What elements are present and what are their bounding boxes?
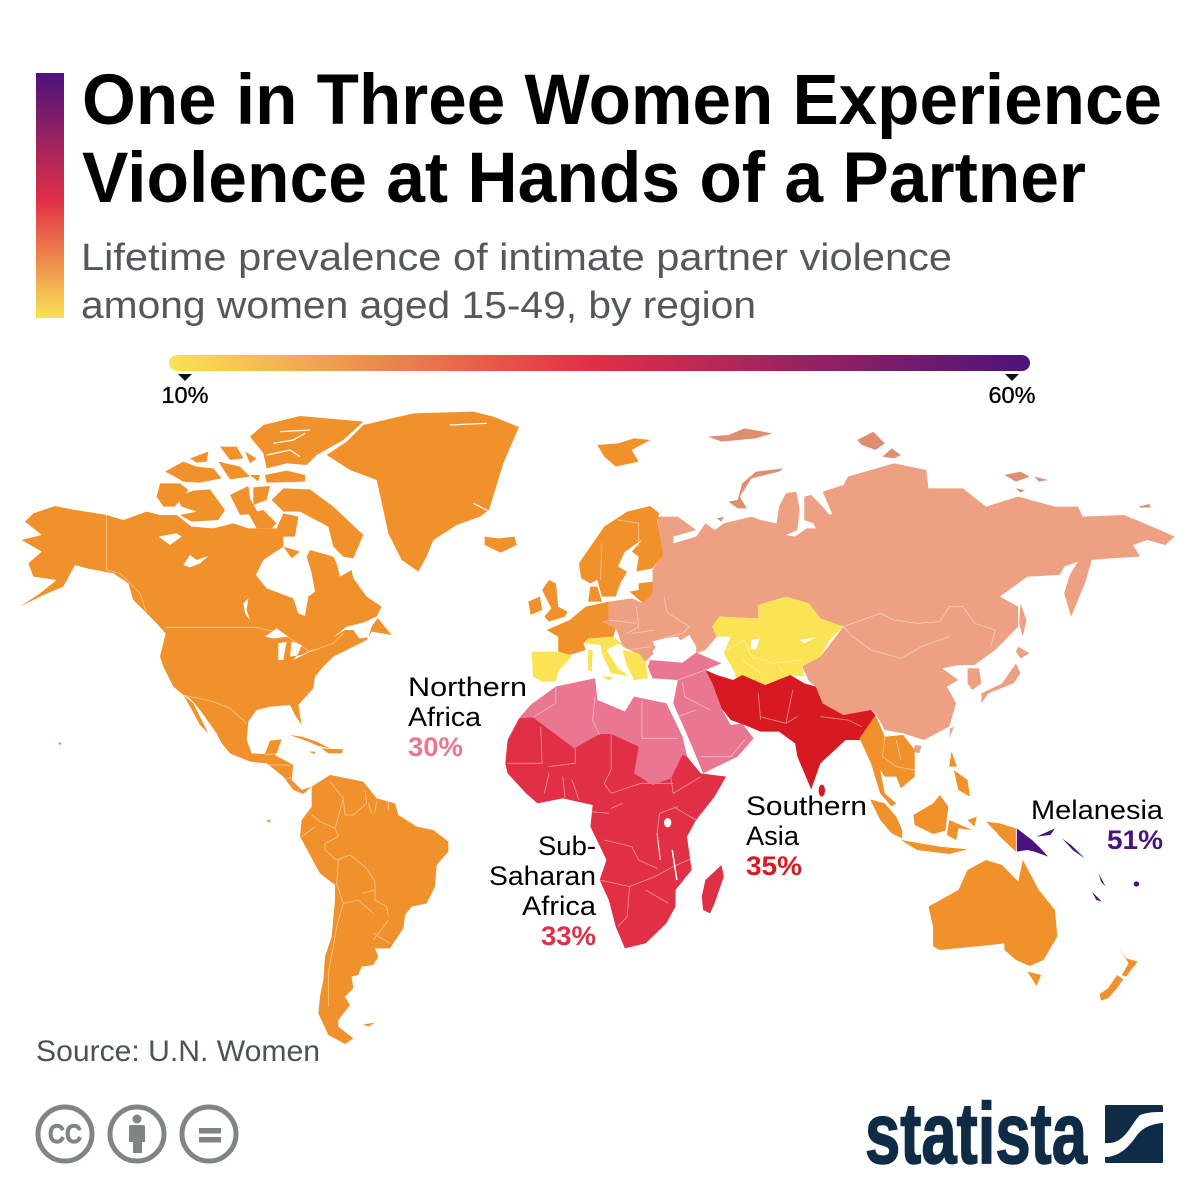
label: Northern Africa: Africa	[408, 702, 482, 732]
colour scale legend: 60%	[988, 382, 1036, 408]
region: Southern Asia	[705, 670, 876, 797]
icon: attribution	[110, 1107, 164, 1161]
map: Western Europe and Scandinavia	[485, 438, 663, 655]
label: Southern Asia: 35%	[746, 851, 802, 881]
title	[82, 61, 1162, 218]
map: South America and the Caribbean	[265, 735, 448, 1044]
title: One in Three Women Experience	[82, 61, 1162, 140]
label: Sub-Saharan Africa: 33%	[541, 921, 596, 951]
accent bar	[36, 73, 64, 318]
subtitle	[81, 237, 952, 327]
map: Southern Europe	[532, 637, 648, 682]
label: Sub-Saharan Africa: Africa	[522, 891, 597, 921]
icon: no derivatives	[182, 1107, 236, 1161]
colour scale legend: 10%	[162, 382, 208, 408]
subtitle: Lifetime prevalence of intimate partner violence	[81, 237, 952, 279]
region: Northern Africa and Western Asia	[519, 653, 754, 785]
label: Northern Africa	[408, 672, 527, 762]
map: Europe and Russia and Asia	[485, 428, 1175, 753]
label: Melanesia	[1031, 795, 1164, 855]
map: seas	[652, 635, 735, 680]
world map	[20, 412, 1175, 1044]
map: Central Asia	[712, 597, 843, 685]
title: Violence at Hands of a Partner	[82, 139, 1086, 218]
map: North America and Greenland	[20, 412, 519, 794]
label: Northern Africa: 30%	[408, 732, 463, 762]
label: Northern Africa: Northern	[408, 672, 527, 702]
subtitle: among women aged 15-49, by region	[81, 285, 756, 327]
label: Melanesia: 51%	[1107, 825, 1163, 855]
statista wordmark: statista	[865, 1086, 1088, 1182]
label: Sub-Saharan Africa	[489, 831, 597, 951]
label: Sub-Saharan Africa: Saharan	[489, 861, 596, 891]
icon: creative commons: CC	[48, 1119, 82, 1149]
map: Russia, China, Eastern Europe	[602, 463, 1175, 740]
region: South-East Asia and Australasia	[860, 715, 1138, 1001]
label: Southern Asia	[746, 791, 867, 881]
region: Sub-Saharan Africa	[505, 678, 726, 948]
label: Southern Asia: Southern	[746, 791, 867, 821]
region: Melanesia	[1017, 828, 1139, 902]
source: Source: U.N. Women	[36, 1035, 320, 1068]
label: Southern Asia: Asia	[746, 821, 800, 851]
label: Melanesia: Melanesia	[1031, 795, 1164, 825]
statista logo mark	[1105, 1105, 1163, 1163]
colour scale legend	[162, 355, 1036, 408]
map: Africa, Middle East, South Asia, Oceania	[505, 653, 1139, 1001]
label: Sub-Saharan Africa: Sub-	[538, 831, 596, 861]
icon: creative commons	[38, 1107, 92, 1161]
map: Arctic islands	[708, 428, 1151, 522]
